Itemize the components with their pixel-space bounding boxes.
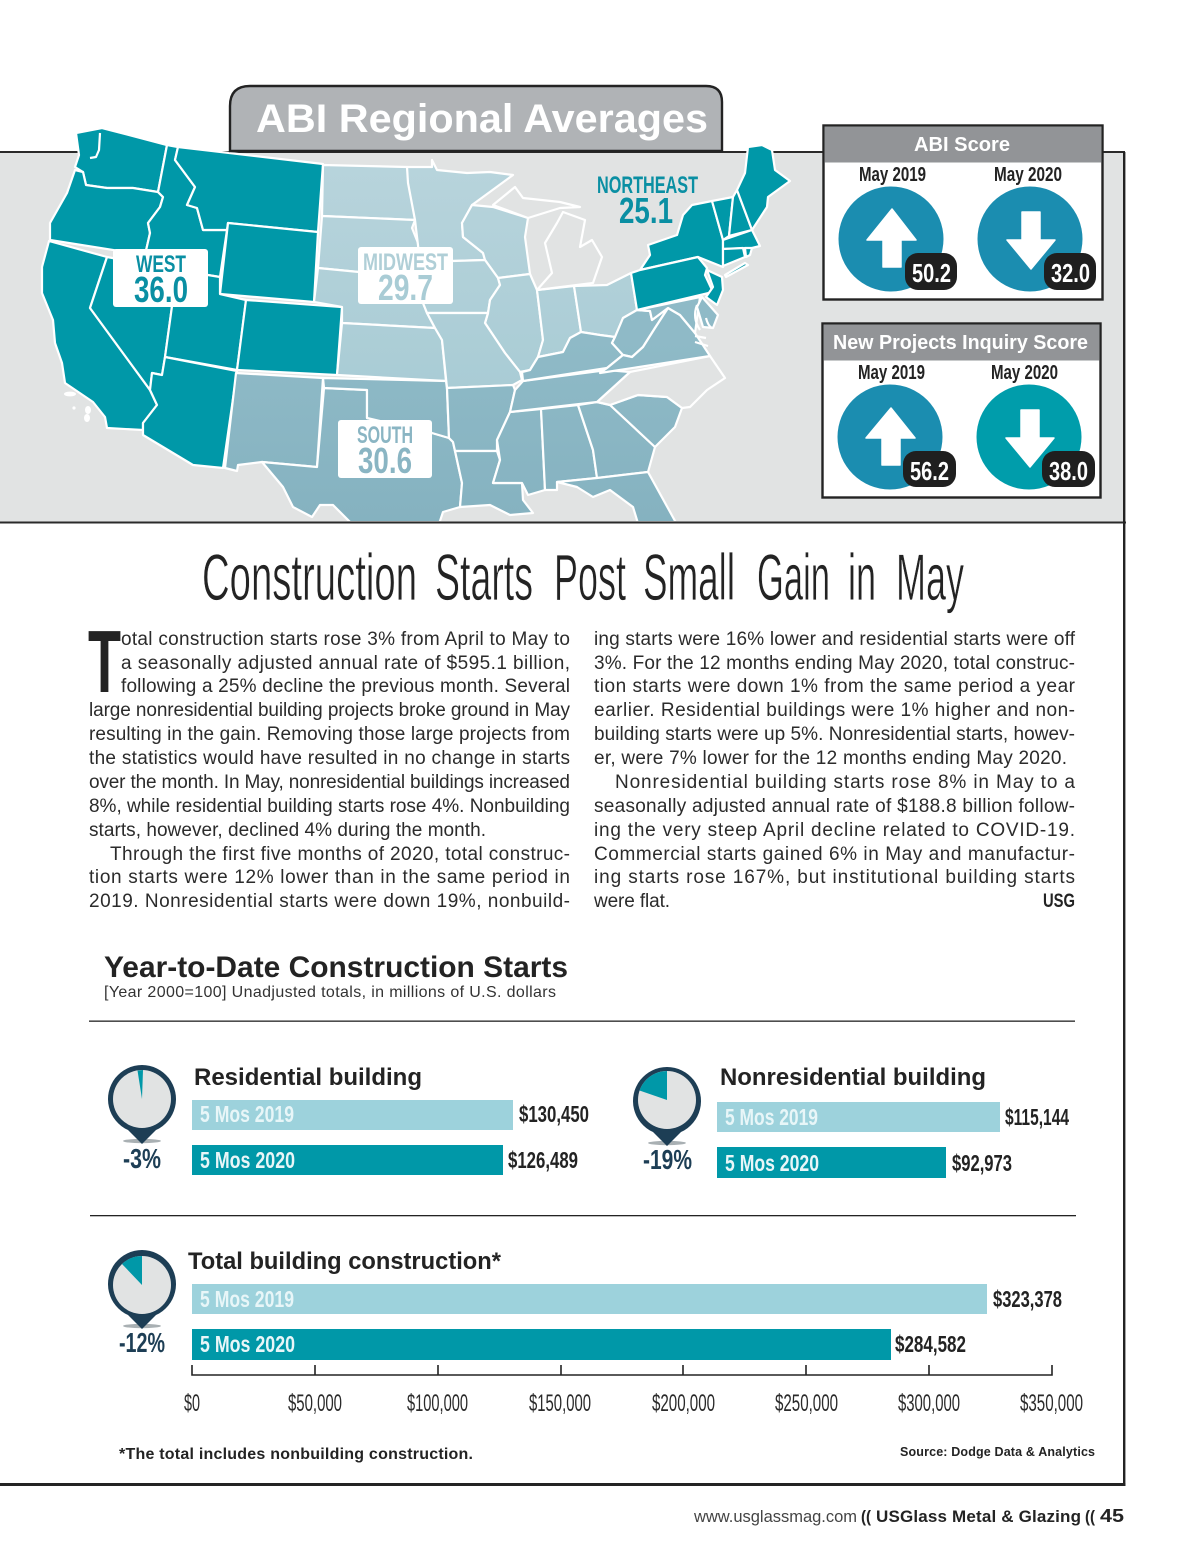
- Northeast region states: [631, 145, 790, 310]
- icon: down arrow 32.0: [978, 186, 1096, 292]
- Chesapeake Bay lines: [695, 305, 712, 346]
- panel: map background: [0, 151, 1126, 524]
- article: column two: USG: [1043, 891, 1075, 912]
- icon: up arrow 56.2: 56.2: [910, 456, 949, 486]
- panel: New Projects Inquiry Score: May 2020: [991, 362, 1058, 384]
- article: column one: starts, however, declined 4% during the month.: [89, 820, 486, 841]
- article: column two: ing the very steep April decline related to COVID-19.: [594, 820, 1075, 841]
- page footer: ((: [861, 1507, 871, 1526]
- panel: ABI Score: May 2019: [859, 164, 926, 186]
- footnote: *The total includes nonbuilding construction.: [119, 1446, 473, 1463]
- panel: New Projects Inquiry Score: [822, 324, 1100, 498]
- chart axis: $350,000: [1020, 1390, 1083, 1417]
- Michigan outline: [493, 187, 602, 290]
- drop cap T: T: [88, 612, 121, 711]
- label: Midwest 29.7: [358, 247, 453, 308]
- article: column two: Commercial starts gained 6% in May and manufactur-: [594, 844, 1075, 865]
- Midwest region states: [314, 160, 637, 388]
- tab: ABI Regional Averages: [230, 86, 722, 151]
- panel: ABI Score: [824, 126, 1102, 300]
- icon: pie pin -19%: [633, 1067, 701, 1175]
- panel: New Projects Inquiry Score: May 2019: [858, 362, 925, 384]
- title: Gain: [757, 540, 830, 614]
- article: column one: the statistics would have resulted in no change in starts: [89, 748, 570, 769]
- chart: total building construction: $323,378: [993, 1286, 1062, 1312]
- page footer: ((: [1085, 1507, 1095, 1526]
- chart: nonresidential building: $92,973: [952, 1150, 1012, 1176]
- article: column two: ing starts rose 167%, but institutional building starts: [594, 867, 1075, 888]
- chart heading: [104, 951, 568, 1001]
- chart: nonresidential building: $115,144: [1005, 1104, 1069, 1130]
- title: Construction: [202, 540, 417, 614]
- icon: pie pin -3%: [108, 1065, 176, 1174]
- icon: up arrow 50.2: 50.2: [912, 258, 951, 288]
- article: column two: er, were 7% lower for the 12 months ending May 2020.: [594, 748, 1067, 769]
- chart axis: $250,000: [775, 1390, 838, 1417]
- chart axis: $0: [184, 1390, 200, 1417]
- chart: nonresidential building: [633, 1064, 1069, 1178]
- chart heading: Year-to-Date Construction Starts: [104, 951, 568, 984]
- article: column two: were flat.: [593, 891, 670, 912]
- label: Northeast 25.1: [597, 172, 698, 231]
- chart axis: $100,000: [407, 1390, 468, 1417]
- article: column two: earlier. Residential buildings were 1% higher and non-: [594, 700, 1075, 721]
- article: column two: ing starts were 16% lower and residential starts were off: [594, 629, 1076, 650]
- chart: nonresidential building: 5 Mos 2019: [725, 1104, 818, 1130]
- article: column two: tion starts were down 1% from the same period a year: [594, 676, 1076, 697]
- Puget Sound: [90, 133, 100, 158]
- icon: pie pin -3%: -3%: [123, 1143, 161, 1174]
- chart: residential building: [108, 1064, 589, 1175]
- article: column one: following a 25% decline the previous month. Several: [121, 676, 570, 697]
- chart: total building construction: 5 Mos 2019: [200, 1286, 294, 1312]
- chart axis: $150,000: [529, 1390, 591, 1417]
- label: Midwest 29.7: MIDWEST: [363, 249, 448, 276]
- title: Small: [643, 540, 735, 614]
- article: column one: large nonresidential building projects broke ground in May: [89, 700, 570, 721]
- label: South 30.6: [338, 420, 432, 481]
- article: column two: 3%. For the 12 months ending May 2020, total construc-: [594, 653, 1075, 674]
- article: column two: [593, 629, 1076, 912]
- title: Post: [554, 540, 626, 614]
- article: column one: [88, 612, 570, 912]
- source: Source: Dodge Data & Analytics: [900, 1445, 1095, 1459]
- icon: up arrow 56.2: [838, 384, 956, 490]
- label: South 30.6: SOUTH: [357, 422, 413, 449]
- article: column one: over the month. In May, nonresidential buildings increased: [89, 772, 570, 793]
- chart heading: [Year 2000=100] Unadjusted totals, in millions of U.S. dollars: [104, 984, 556, 1001]
- label: West 36.0: WEST: [136, 251, 186, 278]
- panel: ABI Score: ABI Score: [914, 134, 1010, 156]
- article: column one: Through the first five months of 2020, total construc-: [110, 844, 570, 865]
- article: column one: a seasonally adjusted annual rate of $595.1 billion,: [121, 653, 570, 674]
- article: column two: Nonresidential building starts rose 8% in May to a: [615, 772, 1075, 793]
- South region states: [225, 297, 725, 530]
- label: Northeast 25.1: 25.1: [619, 190, 673, 231]
- chart: total building construction: 5 Mos 2020: [200, 1331, 295, 1357]
- article: column one: 2019. Nonresidential starts were down 19%, nonbuild-: [89, 891, 570, 912]
- California islands: [64, 392, 91, 422]
- icon: down arrow 38.0: [976, 384, 1095, 490]
- chart: residential building: 5 Mos 2020: [200, 1147, 295, 1173]
- icon: pie pin -19%: -19%: [643, 1144, 692, 1175]
- chart: total building construction: [108, 1248, 1062, 1360]
- title: in: [848, 540, 876, 614]
- page footer: www.usglassmag.com: [693, 1508, 857, 1526]
- chart: nonresidential building: Nonresidential building: [720, 1064, 986, 1091]
- chart axis: $300,000: [898, 1390, 960, 1417]
- title: May: [896, 540, 964, 614]
- chart: residential building: $126,489: [508, 1147, 578, 1173]
- label: West 36.0: [113, 249, 208, 310]
- tab: ABI Regional Averages: ABI Regional Averages: [256, 97, 708, 141]
- chart: total building construction: $284,582: [895, 1331, 966, 1357]
- article: column one: resulting in the gain. Removing those large projects from: [89, 724, 570, 745]
- chart axis: $50,000: [288, 1390, 342, 1417]
- label: Midwest 29.7: 29.7: [378, 267, 433, 308]
- West region states: [42, 128, 342, 468]
- map: United States by region: [42, 128, 790, 530]
- icon: pie pin -12%: -12%: [119, 1327, 165, 1358]
- panel: New Projects Inquiry Score: New Projects Inquiry Score: [833, 332, 1088, 354]
- page footer: 45: [1100, 1506, 1124, 1526]
- page footer: [693, 1506, 1124, 1526]
- label: South 30.6: 30.6: [358, 440, 412, 481]
- page footer: USGlass Metal & Glazing: [876, 1507, 1081, 1526]
- chart: residential building: Residential building: [194, 1064, 422, 1091]
- article: column one: 8%, while residential building starts rose 4%. Nonbuilding: [89, 796, 570, 817]
- label: West 36.0: 36.0: [134, 269, 188, 310]
- title: Starts: [435, 540, 533, 614]
- chart: total building construction: Total building construction*: [188, 1248, 502, 1275]
- chart: nonresidential building: 5 Mos 2020: [725, 1150, 819, 1176]
- icon: pie pin -12%: [108, 1250, 176, 1358]
- article: column one: tion starts were 12% lower than in the same period in: [89, 867, 570, 888]
- chart: residential building: $130,450: [519, 1101, 589, 1127]
- article: column two: building starts were up 5%. Nonresidential starts, howev-: [594, 724, 1075, 745]
- label: Northeast 25.1: NORTHEAST: [597, 172, 698, 199]
- title: [202, 540, 964, 614]
- icon: up arrow 50.2: [838, 186, 957, 292]
- chart axis: [184, 1365, 1083, 1417]
- chart axis: $200,000: [652, 1390, 715, 1417]
- icon: down arrow 32.0: 32.0: [1051, 258, 1090, 288]
- panel: ABI Score: May 2020: [994, 164, 1062, 186]
- article: column one: otal construction starts rose 3% from April to May to: [121, 629, 570, 650]
- chart: residential building: 5 Mos 2019: [200, 1101, 294, 1127]
- icon: down arrow 38.0: 38.0: [1049, 456, 1088, 486]
- article: column two: seasonally adjusted annual rate of $188.8 billion follow-: [594, 796, 1075, 817]
